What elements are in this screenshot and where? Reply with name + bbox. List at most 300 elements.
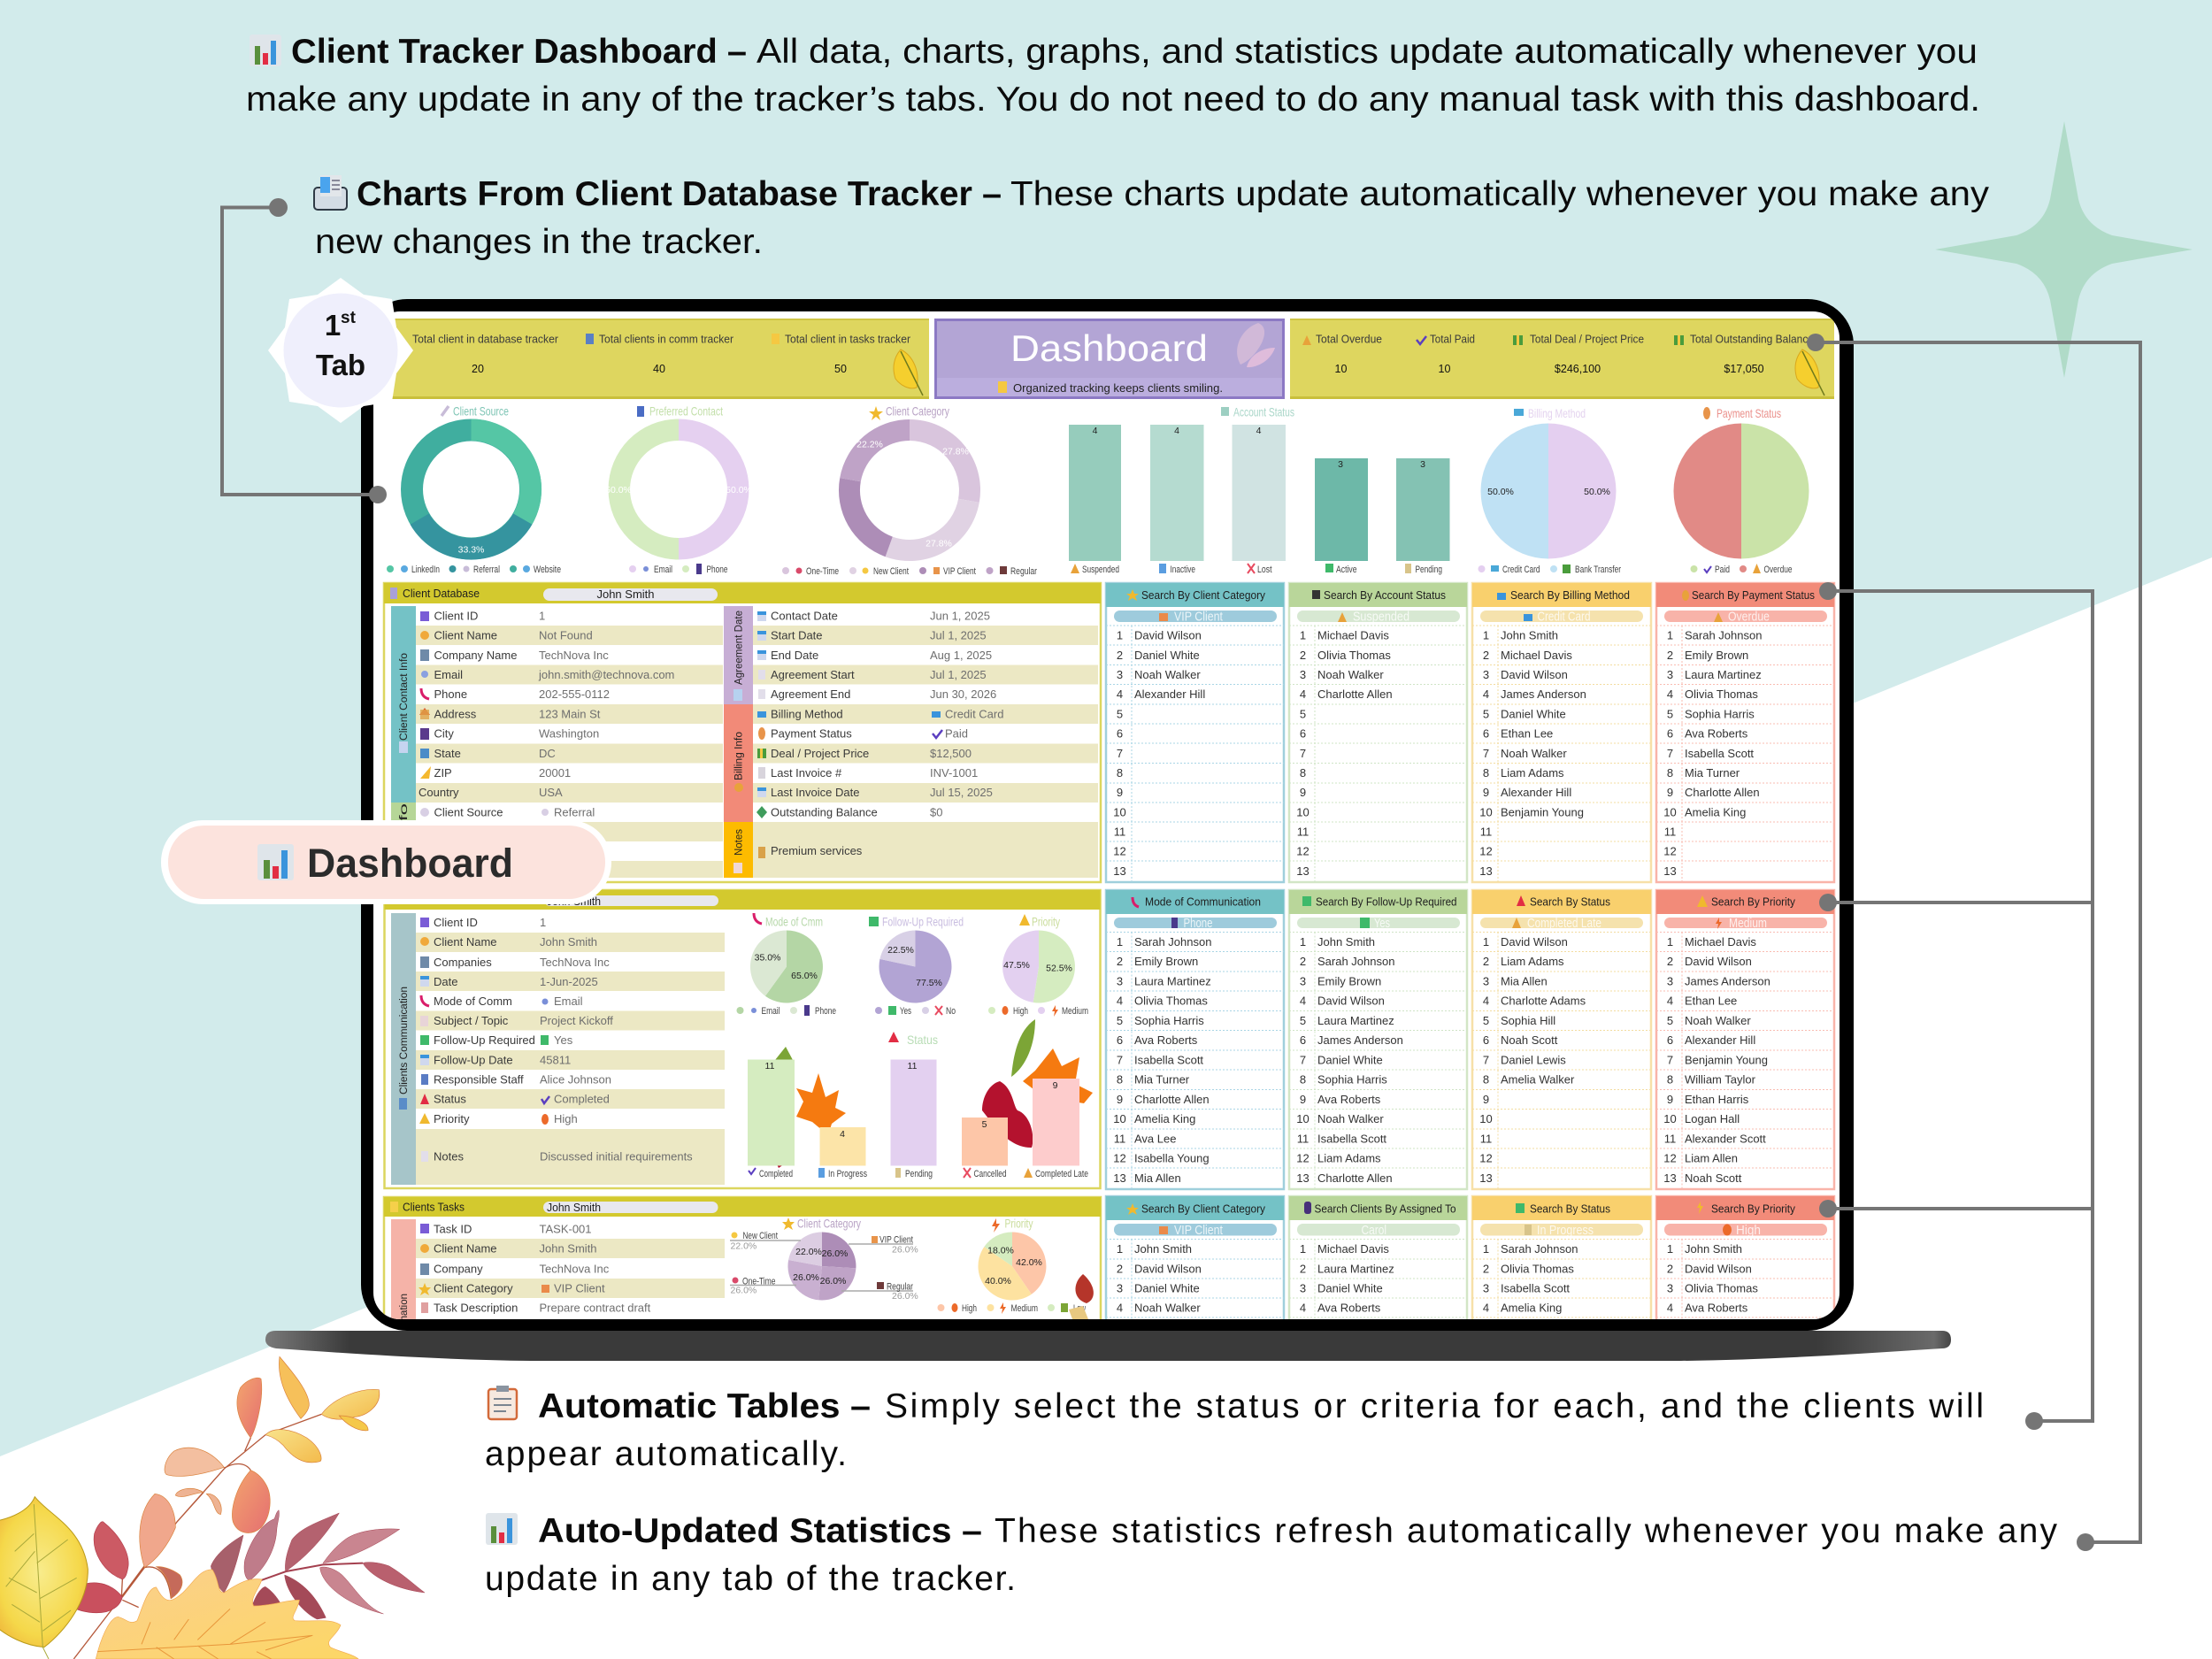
chart: follow-up required pie: [869, 915, 964, 1017]
text: Auto-Updated Statistics: [485, 1512, 2058, 1598]
chart: Account Status bars: Pending: [1416, 565, 1442, 575]
panel: clients communication: [384, 890, 1101, 1188]
search panel: payment status: 12: [1663, 844, 1677, 858]
search panel: priority 2: 2: [1667, 1262, 1673, 1276]
search panel: status 2: Olivia Thomas: [1501, 1262, 1574, 1276]
client contact fields: TechNova Inc: [539, 649, 609, 662]
tasks header text: John Smith: [547, 1201, 601, 1214]
chart: priority pie tasks: 40.0%: [985, 1276, 1011, 1286]
search panel: client category: Search By Client Category: [1141, 588, 1265, 602]
agreement and billing fields: [757, 609, 1003, 858]
panel: client database: [384, 583, 1101, 882]
search panel: mode of communication: 3: [1117, 975, 1123, 987]
search panel: status 2: [1472, 1196, 1651, 1329]
agreement and billing fields: Jun 1, 2025: [930, 609, 990, 623]
client contact fields: Client Source: [434, 805, 503, 819]
search panel: billing method: Credit Card: [1538, 611, 1591, 625]
large oak leaf: [96, 1570, 358, 1659]
search panel: client category: 8: [1117, 766, 1123, 780]
chart: client category pie with callouts: 26.0%: [892, 1291, 918, 1302]
search panel: priority: 12: [1663, 1152, 1677, 1165]
chart: status bars: 4: [840, 1129, 845, 1140]
chart: priority pie tasks: Medium: [1010, 1303, 1038, 1314]
KPI header right: $17,050: [1724, 363, 1764, 375]
search panel: billing method: 5: [1483, 708, 1489, 720]
client contact fields: 20001: [539, 766, 571, 780]
search panel: priority: Logan Hall: [1685, 1112, 1740, 1125]
search panel: payment status: Sarah Johnson: [1685, 628, 1762, 642]
client contact fields: 123 Main St: [539, 708, 601, 720]
chart: priority pie tasks: 18.0%: [987, 1246, 1014, 1256]
search panel: follow-up required: Liam Adams: [1317, 1152, 1381, 1165]
search panel: follow-up required: 8: [1300, 1073, 1306, 1087]
search panel: follow-up required: 13: [1296, 1171, 1310, 1185]
communication fields: Email: [554, 995, 583, 1008]
search panel: mode of communication: 9: [1117, 1093, 1123, 1106]
search panel: client category 2: 1: [1117, 1242, 1123, 1256]
client contact fields: Washington: [539, 727, 599, 740]
heading text: Charts From Client Database Tracker: new changes in the tracker.: [315, 223, 763, 261]
heading text: Charts From Client Database Tracker: These charts update automatically whenever you make any: [1010, 175, 1990, 213]
chart: mode of comm pie: Mode of Cmm: [765, 915, 823, 929]
heading text: Charts From Client Database Tracker: Charts From Client Database Tracker –: [357, 175, 1002, 213]
dashboard screen contents: [379, 319, 1834, 1368]
search panel: account status: 1: [1300, 628, 1306, 642]
search panel: priority: 13: [1663, 1171, 1677, 1185]
search panel: account status: 5: [1300, 708, 1306, 720]
client contact fields: DC: [539, 747, 556, 760]
search panel: status: Mia Allen: [1501, 975, 1548, 987]
chart: Client Category donut: 27.8%: [926, 538, 952, 549]
search panel: priority: Noah Walker: [1685, 1014, 1751, 1027]
search panel: assigned to: Laura Martinez: [1317, 1262, 1394, 1276]
chart: client category pie with callouts: 26.0%: [731, 1285, 757, 1295]
search panel: billing method: 7: [1483, 747, 1489, 760]
search panel: priority 2: 3: [1667, 1281, 1673, 1295]
section strips: Agreement Date: [734, 611, 745, 685]
search panel: payment status: Emily Brown: [1685, 649, 1748, 662]
search panel: priority 2: David Wilson: [1685, 1262, 1752, 1276]
chart: Client Category donut: VIP Client: [943, 566, 976, 577]
chart: status bars: Pending: [905, 1169, 933, 1179]
KPI header left: 50: [834, 363, 847, 375]
search panel: client category 2: Search By Client Category: [1141, 1202, 1265, 1216]
search panel: status: 7: [1483, 1053, 1489, 1067]
client contact fields: ZIP: [434, 766, 452, 780]
chart: Account Status bars: Suspended: [1082, 565, 1119, 575]
search panel: payment status: Search By Payment Status: [1692, 588, 1815, 602]
chart: follow-up required pie: Follow-Up Required: [882, 915, 964, 929]
search panel: mode of communication: Laura Martinez: [1134, 975, 1211, 987]
communication fields: Client Name: [434, 935, 497, 949]
search panel: priority: Ethan Lee: [1685, 995, 1737, 1008]
search panel: priority: William Taylor: [1685, 1073, 1756, 1087]
search panel: follow-up required: 7: [1300, 1053, 1306, 1067]
search panel: assigned to: Ava Roberts: [1317, 1301, 1381, 1315]
section strips: Client Contact Info: [399, 653, 410, 741]
search panel: billing method: 10: [1479, 805, 1493, 819]
section strips: Notes: [734, 829, 745, 856]
search panel: priority: 11: [1664, 1133, 1676, 1145]
chart: Billing Method pie: Bank Transfer: [1575, 565, 1621, 575]
text: Automatic Tables: appear automatically.: [485, 1435, 847, 1473]
agreement and billing fields: Jul 1, 2025: [930, 668, 987, 681]
text: Auto-Updated Statistics: These statistics refresh automatically whenever you make any: [995, 1512, 2058, 1550]
client contact fields: Address: [434, 708, 477, 720]
search panel: payment status: 9: [1667, 786, 1673, 799]
tasks fields: Prepare contract draft: [540, 1301, 651, 1315]
search panel: account status: Olivia Thomas: [1317, 649, 1391, 662]
KPI header left: [379, 319, 929, 399]
communication fields: Companies: [434, 956, 492, 969]
search panel: follow-up required: Emily Brown: [1317, 975, 1381, 987]
text: Automatic Tables: Simply select the status or criteria for each, and the clients will: [885, 1387, 1984, 1425]
search panel: mode of communication: Phone: [1184, 917, 1212, 931]
search panel: status: Sophia Hill: [1501, 1014, 1555, 1027]
red leaves: [62, 1522, 128, 1613]
chart: Account Status bars: Account Status: [1233, 405, 1294, 419]
agreement and billing fields: Agreement End: [771, 687, 850, 701]
search panel: mode of communication: Isabella Scott: [1134, 1053, 1203, 1067]
tasks fields: Client Category: [434, 1281, 513, 1295]
badge: 1st Tab: st: [341, 309, 357, 327]
connector: KPI to statistics text: [1807, 334, 2140, 1551]
heading text: Client Tracker Dashboard: [246, 33, 1980, 119]
search panel: assigned to: [1289, 1196, 1467, 1329]
search panel: priority 2: Olivia Thomas: [1685, 1281, 1758, 1295]
chart: Account Status bars: 4: [1174, 426, 1179, 436]
search panel: status: Search By Status: [1530, 895, 1610, 908]
large yellow leaf: [0, 1497, 88, 1659]
search panel: mode of communication: 8: [1117, 1073, 1123, 1087]
chart: Client Category donut: Client Category: [886, 403, 949, 418]
search panel: status: [1472, 890, 1651, 1189]
search panel: status: 4: [1483, 995, 1489, 1008]
search panel: mode of communication: 13: [1113, 1171, 1126, 1185]
search panel: priority 2: Search By Priority: [1711, 1202, 1795, 1216]
communication fields: High: [554, 1112, 578, 1125]
search panel: payment status: Ava Roberts: [1685, 727, 1748, 740]
client contact fields: 1: [539, 609, 545, 623]
search panel: priority: Alexander Scott: [1685, 1133, 1766, 1145]
search panel: billing method: 8: [1483, 766, 1489, 780]
search panel: priority: Michael Davis: [1685, 935, 1756, 949]
search panel: client category 2: VIP Client: [1174, 1224, 1223, 1238]
chart: client category pie with callouts: 22.0%: [795, 1247, 822, 1257]
communication name pill: John Smith: [547, 895, 601, 908]
search panel: account status: 7: [1300, 747, 1306, 760]
KPI header right: [1290, 319, 1834, 399]
connector: charts to client source: [222, 198, 387, 503]
search panel: mode of communication: Sophia Harris: [1134, 1014, 1204, 1027]
search panel: billing method: 2: [1483, 649, 1489, 662]
search panel: billing method: [1472, 583, 1651, 882]
search panel: account status: 3: [1300, 668, 1306, 681]
tasks fields: TASK-001: [540, 1223, 592, 1235]
dashboard title card: Organized tracking keeps clients smiling.: [1013, 381, 1223, 395]
badge: 1st Tab: Tab: [316, 349, 365, 381]
search panel: payment status: 5: [1667, 708, 1673, 720]
search panel: billing method: Benjamin Young: [1501, 805, 1584, 819]
communication fields: Date: [434, 975, 457, 988]
chart: follow-up required pie: No: [946, 1006, 956, 1017]
search panel: priority: [1656, 890, 1834, 1189]
search panel: status: Charlotte Adams: [1501, 995, 1586, 1008]
search panel: status 2: 1: [1483, 1242, 1489, 1256]
communication fields: Project Kickoff: [540, 1014, 613, 1027]
search panel: status: 8: [1483, 1073, 1489, 1087]
client contact fields: Not Found: [539, 628, 593, 642]
KPI header right: 10: [1335, 363, 1347, 375]
chart: Client Category donut: 27.8%: [942, 446, 969, 457]
search panel: billing method: Noah Walker: [1501, 747, 1567, 760]
agreement and billing fields: Last Invoice Date: [771, 786, 859, 799]
search panel: status: 5: [1483, 1014, 1489, 1027]
chart: Account Status bars: Inactive: [1170, 565, 1195, 575]
icon: statistics bar chart: [486, 1513, 518, 1545]
tasks fields: TechNova Inc: [540, 1262, 610, 1276]
search panel: priority 2: 1: [1667, 1242, 1673, 1256]
search panel: client category: 12: [1113, 844, 1126, 858]
search panel: billing method: Ethan Lee: [1501, 727, 1553, 740]
search panel: mode of communication: 12: [1113, 1152, 1126, 1165]
search panel: payment status: Isabella Scott: [1685, 747, 1754, 760]
decorative red leaf: [1069, 1274, 1094, 1319]
search panel: mode of communication: Ava Roberts: [1134, 1033, 1198, 1047]
tablet stand base: [265, 1331, 1951, 1361]
golden and peach leaves: [140, 1356, 380, 1599]
search panel: client category: 6: [1117, 727, 1123, 740]
tasks strip: [391, 1219, 416, 1368]
chart: follow-up required pie: 77.5%: [916, 978, 942, 988]
search panel: priority: 5: [1667, 1014, 1673, 1027]
search panel: client category: 11: [1114, 825, 1125, 839]
search panel: mode of communication: 1: [1117, 935, 1123, 949]
chart: status bars: Status: [907, 1033, 938, 1047]
chart: Client Category donut: [782, 403, 1037, 577]
search panel: status 2: 3: [1483, 1281, 1489, 1295]
search panel: priority: James Anderson: [1685, 975, 1770, 987]
communication fields: 1-Jun-2025: [540, 975, 598, 988]
icon: yellow leaf right: [1795, 349, 1824, 396]
search panel: billing method: 6: [1483, 727, 1489, 740]
agreement and billing fields: Jul 1, 2025: [930, 628, 987, 642]
search panel: follow-up required: Isabella Scott: [1317, 1133, 1386, 1145]
heading text: Client Tracker Dashboard: make any update in any of the tracker’s tabs. You do not need to do any manual task with this dashboard.: [246, 81, 1980, 119]
search panel: mode of communication: 5: [1117, 1014, 1123, 1027]
chart: Payment Status pie: Overdue: [1764, 565, 1793, 575]
client database header text: [390, 587, 718, 601]
communication fields: Notes: [434, 1150, 464, 1163]
chart: mode of comm pie: 35.0%: [755, 952, 780, 963]
search panel: priority: 9: [1667, 1093, 1673, 1106]
search panel: status: 6: [1483, 1033, 1489, 1047]
chart: Account Status bars: 3: [1338, 459, 1343, 470]
search panel: client category 2: David Wilson: [1134, 1262, 1202, 1276]
search panel: billing method: John Smith: [1501, 628, 1558, 642]
tasks fields: VIP Client: [554, 1281, 605, 1295]
search panel: follow-up required: Laura Martinez: [1317, 1014, 1394, 1027]
search panel: mode of communication: Mode of Communication: [1145, 895, 1261, 908]
chart: Client Source donut: [387, 403, 561, 575]
search panel: payment status: 4: [1667, 687, 1673, 701]
chart: client category pie with callouts: [730, 1216, 918, 1302]
dashboard title card: [936, 320, 1283, 398]
tasks fields: Client Name: [434, 1242, 497, 1255]
communication strip: Clients Communication: [399, 987, 410, 1094]
chart: status bars: 5: [982, 1119, 987, 1130]
agreement and billing fields: Last Invoice #: [771, 766, 842, 780]
search panel: follow-up required: James Anderson: [1317, 1033, 1403, 1047]
chart: Payment Status pie: [1674, 406, 1809, 575]
communication fields: Mode of Comm: [434, 995, 512, 1008]
chart: Client Source donut: 33.3%: [458, 545, 484, 556]
chart: Client Category donut: 22.2%: [856, 439, 883, 449]
search panel: assigned to: 3: [1300, 1281, 1306, 1295]
search panel: status: 11: [1480, 1133, 1492, 1145]
chart: Payment Status pie: Paid: [1715, 565, 1730, 575]
search panel: follow-up required: [1289, 890, 1467, 1189]
search panel: priority: Search By Priority: [1711, 895, 1795, 908]
icon: yellow leaf left: [894, 349, 923, 396]
search panel: follow-up required: Sarah Johnson: [1317, 955, 1394, 968]
chart: Billing Method pie: Billing Method: [1528, 406, 1586, 420]
search panel: priority: Benjamin Young: [1685, 1053, 1768, 1067]
search panel: billing method: 1: [1483, 628, 1489, 642]
KPI header left: 20: [472, 363, 484, 375]
search panel: status: 10: [1479, 1112, 1493, 1125]
client contact fields: City: [434, 727, 454, 740]
search panel: account status: [1289, 583, 1467, 882]
chart: follow-up required pie: Yes: [900, 1006, 911, 1017]
communication fields: Responsible Staff: [434, 1072, 524, 1087]
KPI header left: Total client in tasks tracker: [785, 333, 911, 345]
search panel: mode of communication: Isabella Young: [1134, 1152, 1210, 1165]
agreement and billing fields: Premium services: [771, 844, 863, 857]
search panel: status 2: Amelia King: [1501, 1301, 1562, 1315]
communication fields: Status: [434, 1092, 466, 1106]
tasks fields: [419, 1223, 651, 1315]
search panel: billing method: 4: [1483, 687, 1489, 701]
tasks header text: [390, 1200, 718, 1214]
communication strip: [391, 913, 416, 1185]
search panel: follow-up required: 4: [1300, 995, 1306, 1008]
section strips: [391, 606, 753, 878]
agreement and billing fields: Credit Card: [945, 708, 1003, 720]
tasks fields: Task Description: [434, 1301, 518, 1315]
chart: Account Status bars: 4: [1093, 426, 1098, 436]
search panel: billing method: 11: [1480, 825, 1492, 839]
chart: Billing Method pie: Credit Card: [1502, 565, 1540, 575]
communication fields: [419, 916, 693, 1163]
chart: Billing Method pie: 50.0%: [1584, 487, 1610, 497]
text: Auto-Updated Statistics: update in any tab of the tracker.: [485, 1560, 1016, 1598]
chart: Client Category donut: Regular: [1010, 566, 1037, 577]
search panel: priority: David Wilson: [1685, 955, 1752, 968]
search panel: payment status: Amelia King: [1685, 805, 1746, 819]
search panel: client category: 2: [1117, 649, 1123, 662]
tasks fields: Company: [434, 1262, 483, 1276]
search panel: status: 13: [1479, 1171, 1493, 1185]
search panel: priority: Liam Allen: [1685, 1152, 1738, 1165]
search panel: client category: Alexander Hill: [1134, 687, 1205, 701]
chart: Client Source donut: Client Source: [453, 403, 509, 418]
search panel: client category: David Wilson: [1134, 628, 1202, 642]
search panel: payment status: Laura Martinez: [1685, 668, 1762, 681]
client contact fields: Email: [434, 668, 463, 681]
client contact fields: Country: [419, 786, 459, 799]
chart: client category pie with callouts: 26.0%: [820, 1276, 846, 1286]
search panel: follow-up required: John Smith: [1317, 935, 1375, 949]
search panel: payment status: 8: [1667, 766, 1673, 780]
search panel: client category 2: [1106, 1196, 1284, 1329]
KPI header left: 40: [653, 363, 665, 375]
agreement and billing fields: Start Date: [771, 628, 823, 642]
chart: client category pie with callouts: 26.0%: [793, 1272, 819, 1283]
tasks header bar: [384, 1197, 1101, 1217]
search panel: status: 9: [1483, 1093, 1489, 1106]
search panel: client category: 3: [1117, 668, 1123, 681]
heading text: Charts From Client Database Tracker: [315, 175, 1990, 261]
search panel: status: Liam Adams: [1501, 955, 1564, 968]
search panel: client category 2: 2: [1117, 1262, 1123, 1276]
search panel: assigned to: Carol: [1361, 1224, 1386, 1238]
chart: priority pie tasks: 42.0%: [1016, 1257, 1042, 1268]
search panel: client category: 13: [1113, 864, 1126, 878]
communication fields: Completed: [554, 1092, 610, 1106]
search panel: account status: Charlotte Allen: [1317, 687, 1393, 701]
search panel: client category: 7: [1117, 747, 1123, 760]
search panel: client category: [1106, 583, 1284, 882]
client contact fields: Referral: [554, 805, 595, 819]
chart: client category pie with callouts: Regular: [887, 1281, 913, 1292]
search panel: assigned to: Daniel White: [1317, 1281, 1383, 1295]
autumn leaves illustration: [0, 1356, 425, 1659]
KPI header right: Total Paid: [1430, 333, 1475, 345]
search panel: client category 2: 4: [1117, 1301, 1123, 1315]
client contact fields: Company Name: [434, 649, 517, 662]
search panel: mode of communication: 4: [1117, 995, 1123, 1008]
search panel: status: 1: [1483, 935, 1489, 949]
dashboard title card: Dashboard: [1010, 327, 1208, 369]
search panel: mode of communication: Sarah Johnson: [1134, 935, 1211, 949]
heading text: Client Tracker Dashboard: Client Tracker Dashboard –: [291, 33, 747, 71]
chart: priority pie tasks: High: [962, 1303, 977, 1314]
search panel: status: 2: [1483, 955, 1489, 968]
search panel: status: 12: [1479, 1152, 1493, 1165]
search panel: status: Amelia Walker: [1501, 1073, 1575, 1087]
connector: search tables to automatic tables text: [1819, 582, 2093, 1430]
search panel: priority 2: John Smith: [1685, 1242, 1742, 1256]
client contact fields: 202-555-0112: [539, 687, 610, 701]
agreement and billing fields: INV-1001: [930, 766, 978, 780]
search panel: mode of communication: Olivia Thomas: [1134, 995, 1208, 1008]
communication fields: Follow-Up Required: [434, 1033, 535, 1047]
chart: priority pie: 52.5%: [1046, 963, 1072, 973]
search panel: status: Completed Late: [1527, 917, 1601, 931]
search panel: billing method: James Anderson: [1501, 687, 1586, 701]
communication fields: Client ID: [434, 916, 478, 929]
chart: status bars: [748, 1032, 1088, 1179]
search panel: status 2: 2: [1483, 1262, 1489, 1276]
chart: status bars: In Progress: [828, 1169, 867, 1179]
KPI header right: 10: [1439, 363, 1450, 375]
icon: rolodex, charts heading: [314, 175, 347, 210]
search panel: client category: Daniel White: [1134, 649, 1200, 662]
client database header text: Client Database: [403, 587, 480, 600]
search panel: priority: 1: [1667, 935, 1673, 949]
search panel: priority 2: High: [1736, 1224, 1761, 1238]
